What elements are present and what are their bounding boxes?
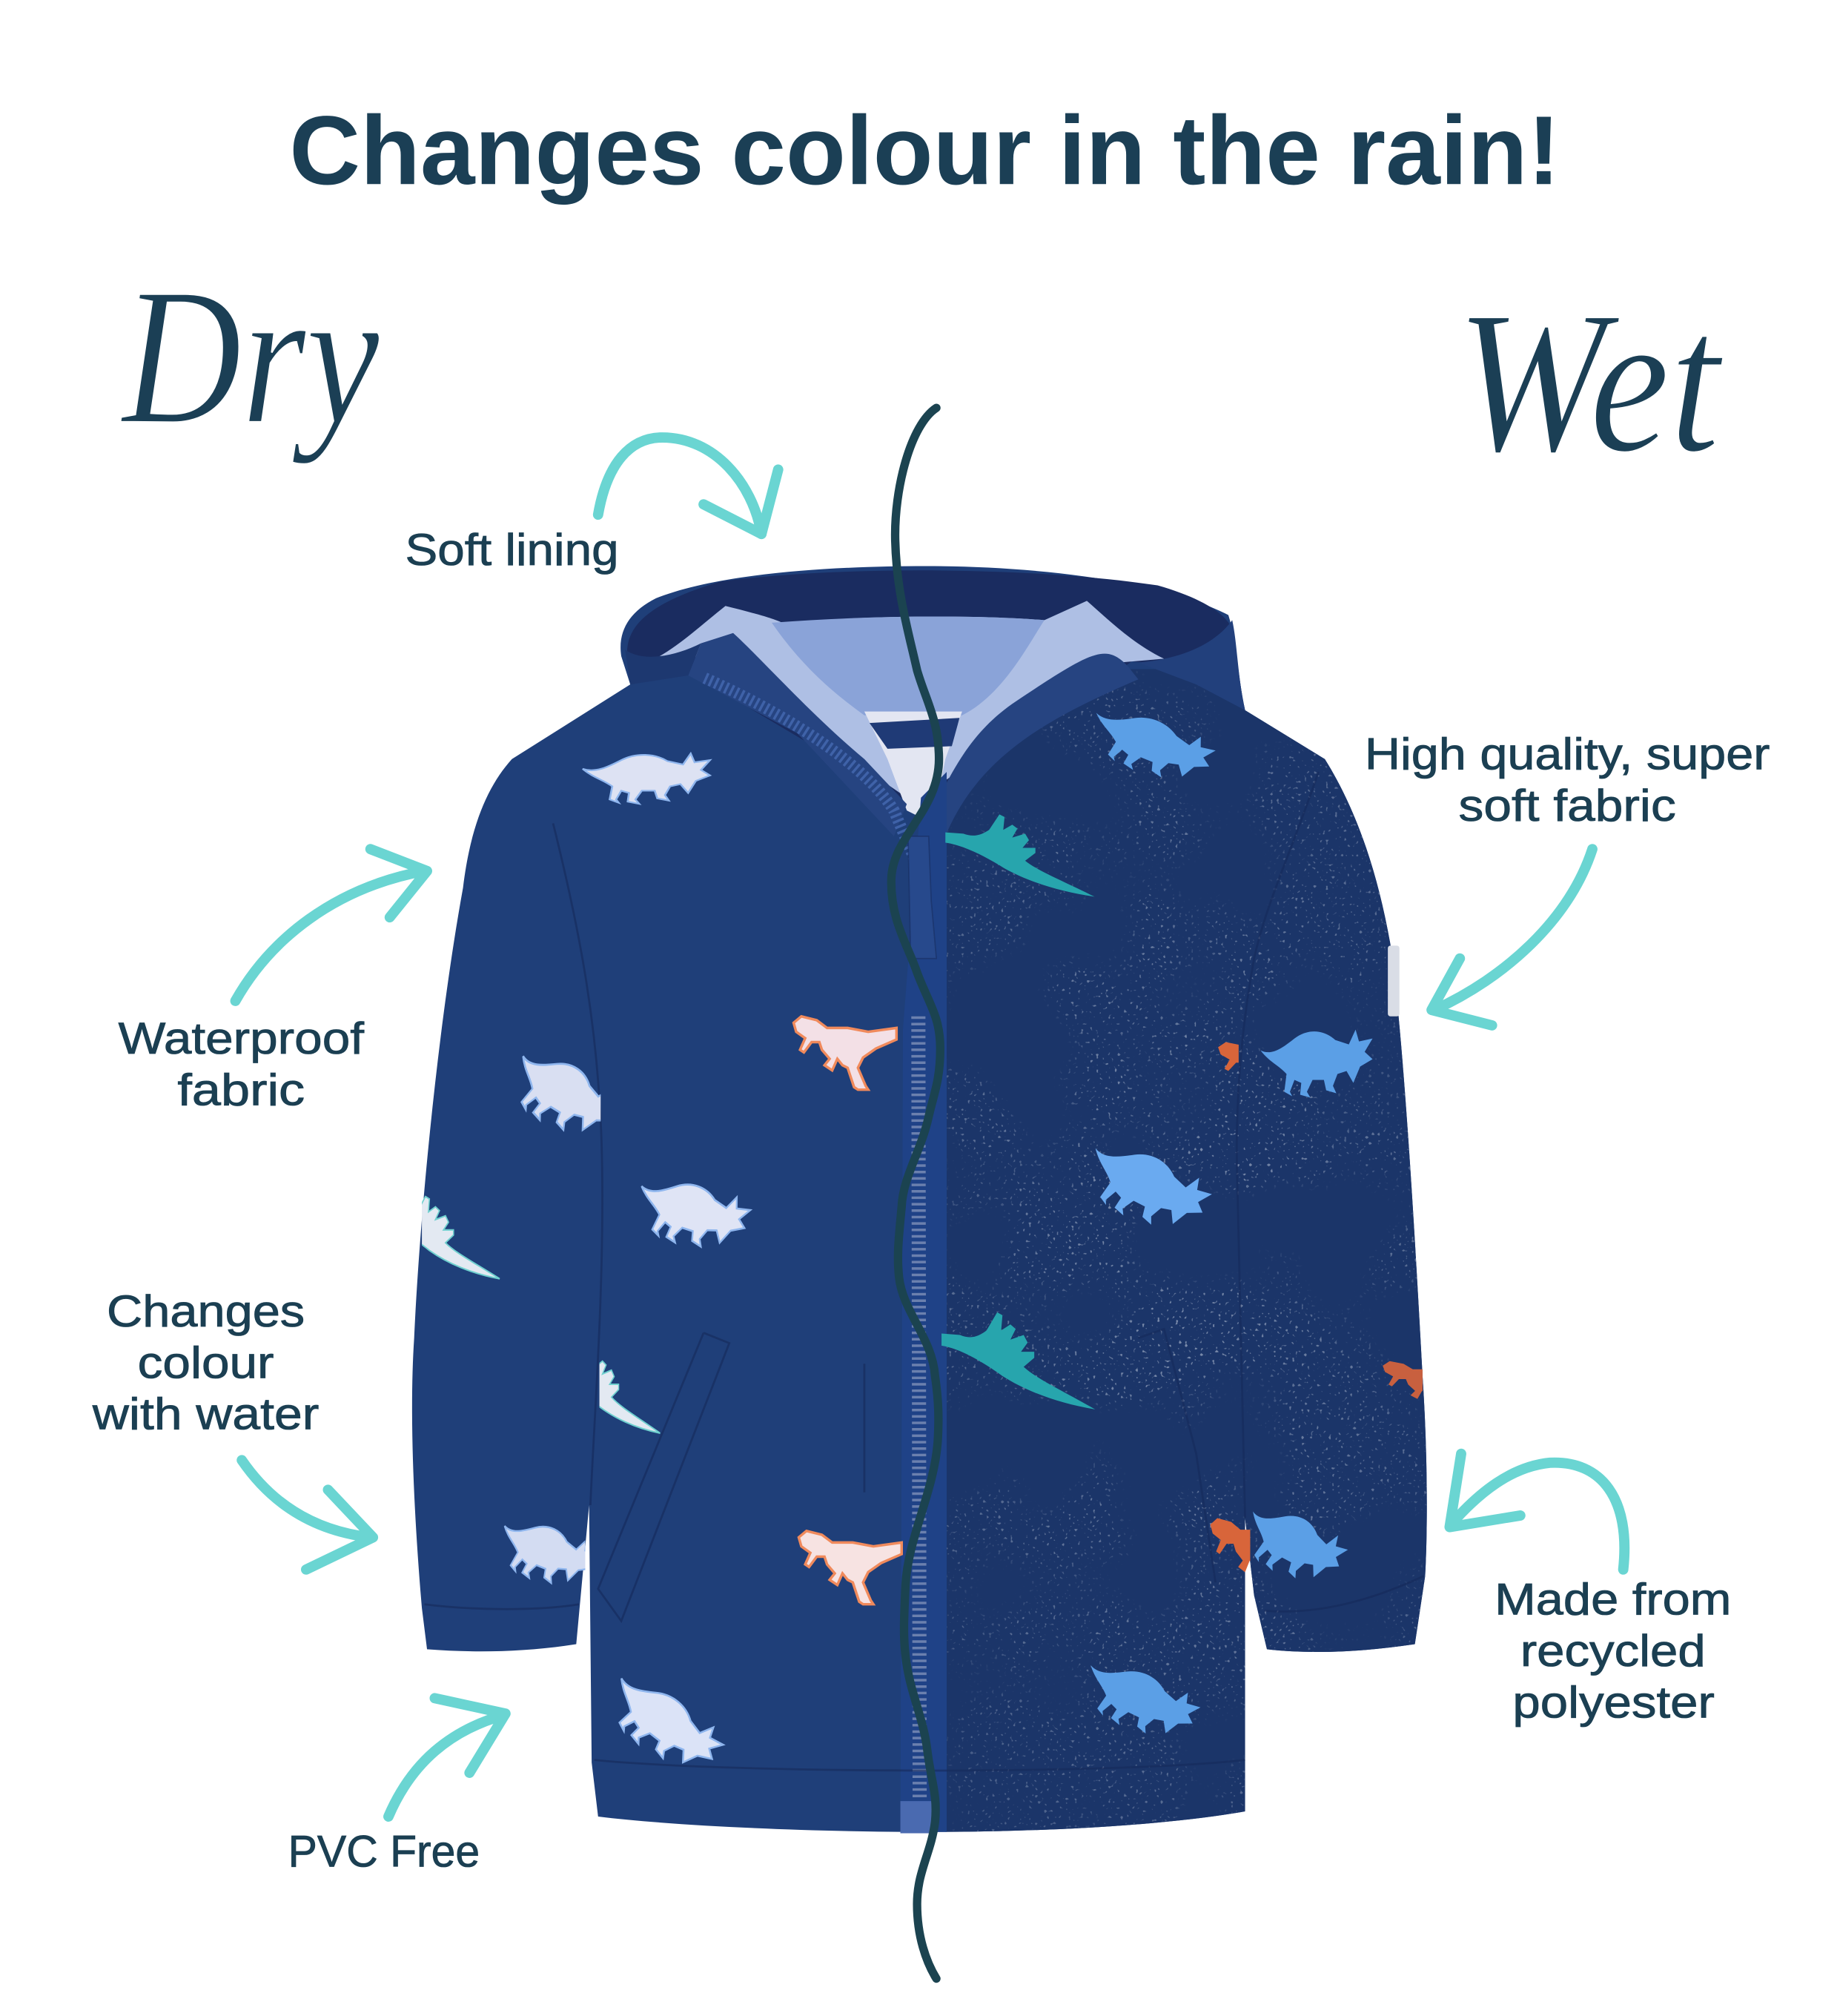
label: waterproof fabric: [119, 1013, 364, 1114]
label: made from recycled polyester: recycled: [1520, 1625, 1706, 1676]
heading: Dry: Dry: [119, 248, 381, 465]
zip bottom stop: [901, 1801, 934, 1834]
label: changes colour with water: colour: [138, 1337, 274, 1387]
arrow: PVC free: [388, 1698, 506, 1817]
label: high quality fabric: soft fabric: [1459, 780, 1676, 830]
arrow: high quality fabric: [1431, 849, 1592, 1025]
centre divider squiggle: [891, 408, 940, 1979]
front placket: [901, 772, 947, 1832]
collar zipper: [705, 678, 916, 862]
fleece lining: [637, 601, 1164, 798]
label: waterproof fabric: Waterproof: [119, 1013, 364, 1063]
left shoulder hood edge: [625, 644, 701, 684]
hood interior: [627, 570, 1232, 798]
label: made from recycled polyester: [1495, 1574, 1731, 1727]
striped tee: [864, 712, 962, 824]
jacket illustration: [383, 566, 1475, 1853]
sleeve tag: [1388, 945, 1400, 1017]
seams and pockets: [425, 772, 1424, 1771]
label: made from recycled polyester: Made from: [1495, 1574, 1731, 1625]
label: high quality fabric: [1365, 729, 1770, 830]
label: changes colour with water: Changes: [107, 1286, 305, 1336]
dinosaurs: wet side: [1073, 697, 1373, 1754]
title: Changes colour in the rain!: [289, 96, 1560, 205]
label: soft lining: Soft lining: [406, 524, 619, 575]
right collar flap: [939, 654, 1139, 836]
wet side shade: [926, 644, 1440, 1853]
zip pull: [908, 836, 936, 959]
label: high quality fabric: High quality, super: [1365, 729, 1770, 779]
heading: Wet: Wet: [1456, 270, 1726, 495]
label: PVC free: PVC Free: [288, 1826, 480, 1877]
arrow: recycled polyester: [1449, 1454, 1624, 1570]
arrow: waterproof fabric: [236, 849, 427, 1001]
label: changes colour with water: [92, 1286, 319, 1439]
hood right outer panel: [1139, 620, 1245, 710]
label: made from recycled polyester: polyester: [1512, 1676, 1715, 1727]
tee stripe: [870, 718, 959, 749]
jacket silhouette: [412, 566, 1427, 1832]
inner lining: [772, 617, 1045, 715]
arrow: soft lining: [598, 437, 778, 534]
label: changes colour with water: with water: [92, 1389, 319, 1439]
left collar flap: [688, 633, 907, 836]
label: waterproof fabric: fabric: [177, 1064, 305, 1114]
front zipper teeth: [918, 1017, 920, 1801]
arrow: changes colour: [242, 1460, 373, 1570]
dinosaurs: dry side: [490, 753, 752, 1785]
